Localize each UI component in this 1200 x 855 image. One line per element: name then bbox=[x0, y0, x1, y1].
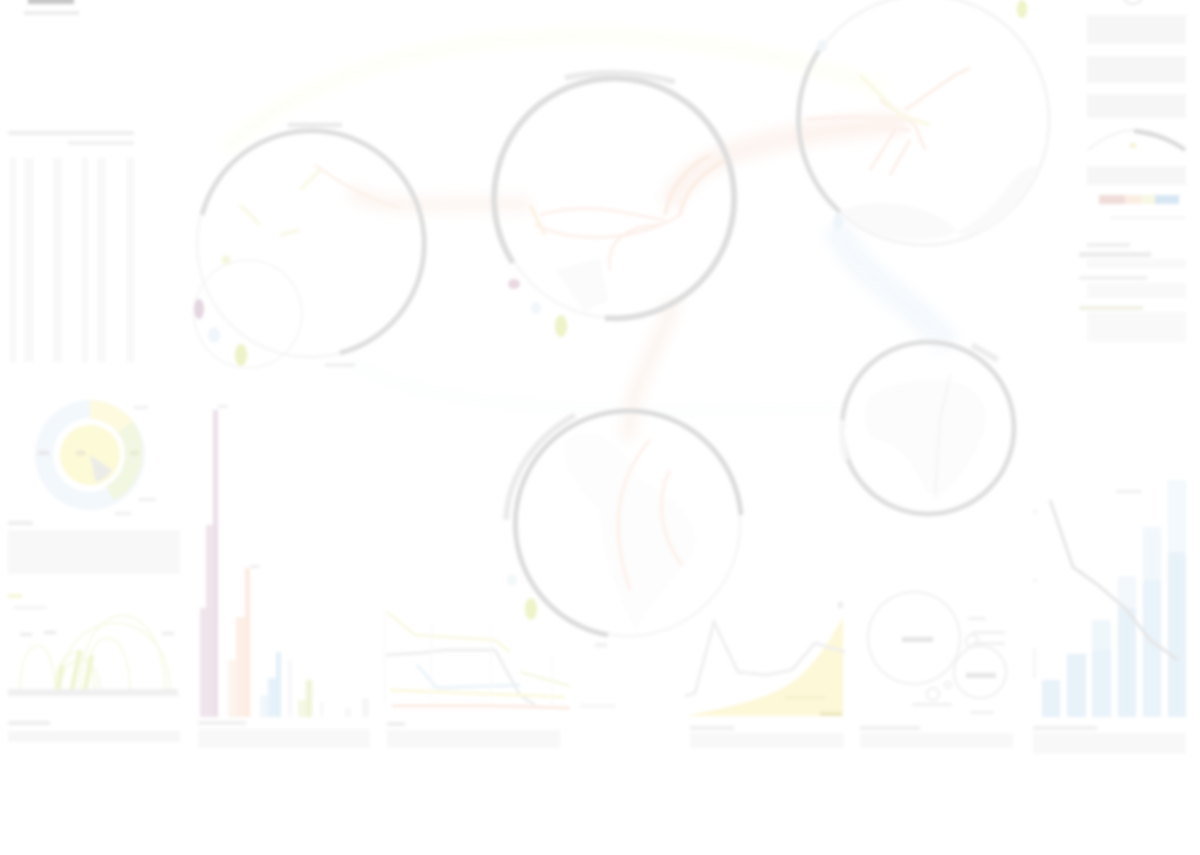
bar chart commentary bbox=[198, 721, 370, 748]
bar and line commentary bbox=[1033, 726, 1186, 754]
colour legend bbox=[1099, 195, 1185, 219]
map circle: left region bbox=[194, 125, 424, 368]
arc diagram commentary bbox=[8, 721, 180, 742]
gauge arc bbox=[1088, 130, 1185, 150]
title bbox=[24, 0, 79, 15]
legend notes bbox=[1079, 243, 1186, 342]
area and line chart bbox=[685, 602, 845, 716]
map circle: right middle region bbox=[842, 342, 1014, 514]
map circle: lower centre region bbox=[506, 411, 741, 647]
area chart commentary bbox=[690, 726, 844, 748]
arc diagram bbox=[8, 594, 178, 696]
bubble chart bbox=[868, 592, 1006, 714]
line chart commentary bbox=[387, 722, 560, 748]
bar and line chart bbox=[1033, 480, 1186, 717]
flow bands between regions bbox=[225, 36, 950, 440]
multi-line chart bbox=[385, 610, 615, 708]
sidebar notes bbox=[1079, 0, 1186, 342]
stepped bar chart bbox=[200, 405, 369, 717]
bubble chart commentary bbox=[860, 726, 1013, 748]
donut commentary bbox=[8, 521, 180, 574]
map circle: centre top region bbox=[494, 73, 736, 337]
ranking table bbox=[8, 131, 134, 362]
donut chart bbox=[38, 400, 156, 515]
map circle: top right region bbox=[798, 0, 1049, 245]
